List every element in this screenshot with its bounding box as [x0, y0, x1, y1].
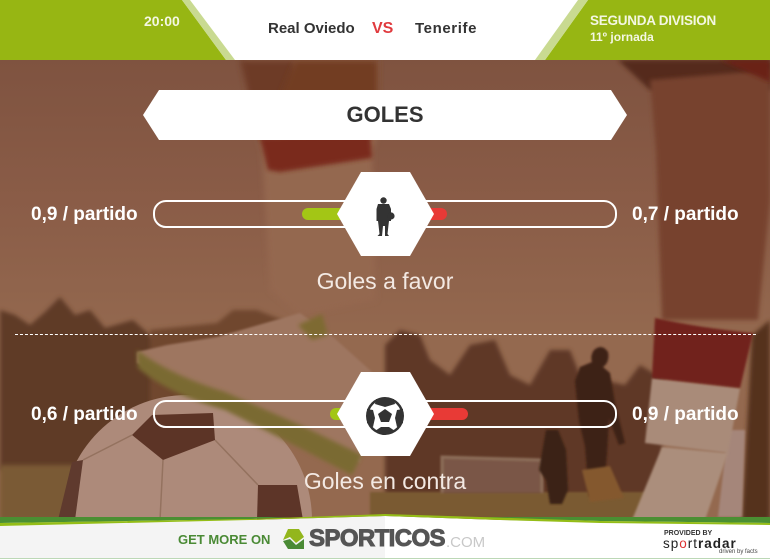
kick-off time: 20:00 — [144, 13, 180, 29]
home value: 0,9 / partido — [31, 204, 138, 225]
home team: Real Oviedo — [268, 20, 355, 37]
title banner — [143, 90, 627, 140]
driven by facts: driven by facts — [719, 549, 758, 555]
competition: SEGUNDA DIVISION — [590, 13, 716, 28]
provided by: PROVIDED BY — [664, 530, 712, 537]
hexagon with player icon — [337, 172, 434, 256]
title: GOLES — [346, 102, 424, 127]
footer — [0, 514, 770, 559]
bar track — [153, 400, 617, 428]
divider — [15, 334, 756, 335]
left leg — [245, 60, 378, 316]
trees left — [0, 297, 160, 470]
people — [575, 347, 625, 496]
stat: goles en contra — [31, 372, 739, 494]
away bar — [420, 208, 447, 220]
vs: VS — [372, 20, 393, 37]
home bar — [330, 408, 352, 420]
.com: .COM — [446, 534, 485, 551]
right leg — [618, 60, 770, 90]
icon: sporticos logo — [283, 529, 304, 549]
header bar — [0, 0, 770, 60]
away team: Tenerife — [415, 20, 477, 37]
get more on: GET MORE ON — [178, 532, 270, 547]
label: Goles en contra — [304, 468, 466, 494]
home value: 0,6 / partido — [31, 404, 138, 425]
label: Goles a favor — [317, 268, 453, 294]
matchday: 11º jornada — [590, 30, 654, 44]
ball — [62, 395, 312, 520]
away value: 0,9 / partido — [632, 404, 739, 425]
away bar — [420, 408, 468, 420]
away value: 0,7 / partido — [632, 204, 739, 225]
sporticos wordmark: SPORTICOS — [309, 525, 445, 552]
bar track — [153, 200, 617, 228]
icon: ball — [366, 397, 404, 435]
goal — [442, 457, 542, 493]
sportradar logo: sportradar — [663, 536, 737, 551]
home bar — [302, 208, 352, 220]
icon: player — [376, 197, 395, 236]
trees right — [385, 330, 665, 500]
hexagon with ball icon — [337, 372, 434, 456]
shoe — [137, 313, 372, 463]
stat: goles a favor — [31, 172, 739, 294]
